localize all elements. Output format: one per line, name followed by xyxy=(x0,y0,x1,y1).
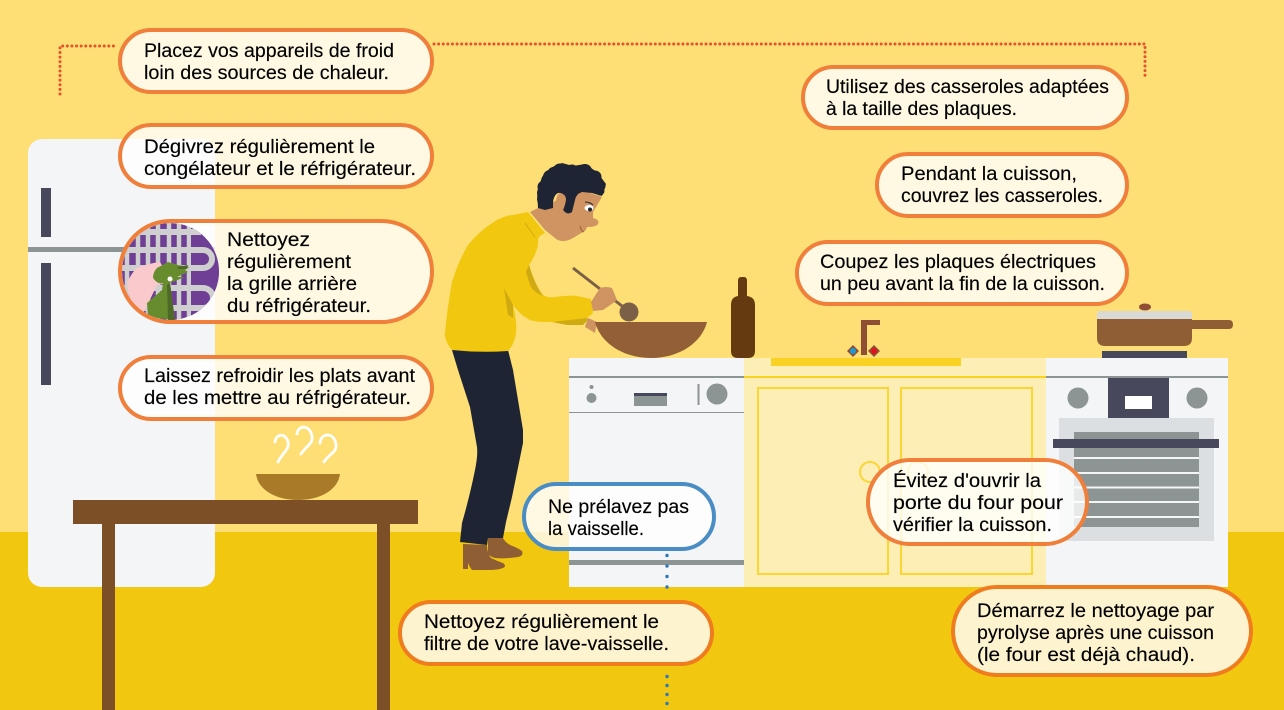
dotted line: blue xyxy=(665,554,669,705)
callout: refroidir les plats: de les mettre au réfrigérateur. xyxy=(144,388,411,409)
oven xyxy=(1046,358,1228,587)
callout: casseroles adaptées: Utilisez des casseroles adaptées xyxy=(826,77,1109,98)
callout: couper les plaques: un peu avant la fin de la cuisson. xyxy=(820,274,1105,295)
callout: porte du four xyxy=(868,460,1087,544)
callout: ne pas prélaver: la vaisselle. xyxy=(548,519,644,540)
callout: couvrir les casseroles: couvrez les casseroles. xyxy=(901,186,1103,207)
callout: filtre du lave-vaisselle: Nettoyez régulièrement le xyxy=(424,612,659,633)
boots xyxy=(463,538,522,570)
callout: dégivrer: congélateur et le réfrigérateur. xyxy=(144,159,416,180)
hand on bowl xyxy=(585,318,597,333)
ear xyxy=(556,193,566,210)
callout: ne pas prélaver xyxy=(524,484,714,549)
head and neck xyxy=(530,190,602,241)
floor xyxy=(0,532,1284,710)
callout: grille arrière: régulièrement xyxy=(227,252,352,273)
dishwasher xyxy=(569,358,745,587)
callout: filtre du lave-vaisselle xyxy=(400,602,712,664)
callout: pyrolyse: (le four est déjà chaud). xyxy=(977,645,1195,666)
eye xyxy=(584,202,594,212)
hair xyxy=(537,163,606,214)
callout: porte du four: porte du four pour xyxy=(893,493,1064,514)
callout: casseroles adaptées xyxy=(803,67,1127,128)
callout: appareils de froid: Placez vos appareils de froid xyxy=(144,41,394,62)
callout: pyrolyse: Démarrez le nettoyage par xyxy=(977,601,1215,622)
callout: porte du four: vérifier la cuisson. xyxy=(893,515,1052,536)
callout: filtre du lave-vaisselle: filtre de votre lave-vaisselle. xyxy=(424,634,669,655)
dotted line: red top route xyxy=(60,44,1145,94)
faucet xyxy=(847,320,880,357)
smile xyxy=(580,226,584,232)
sweater xyxy=(445,212,593,352)
callout: grille arrière: la grille arrière xyxy=(227,274,357,295)
callout: couvrir les casseroles xyxy=(877,154,1127,216)
callout: ne pas prélaver: Ne prélavez pas xyxy=(548,497,689,518)
callout: appareils de froid xyxy=(120,30,432,92)
callout: couper les plaques: Coupez les plaques électriques xyxy=(820,252,1096,273)
mixing bowl xyxy=(595,322,707,358)
cabinet and sink xyxy=(744,358,1047,587)
callout: refroidir les plats: Laissez refroidir les plats avant xyxy=(144,366,416,387)
callout: pyrolyse xyxy=(953,587,1251,675)
trousers xyxy=(452,350,523,545)
table with bowl and steam xyxy=(73,427,418,710)
callout: couper les plaques xyxy=(797,242,1127,304)
callout: grille arrière: du réfrigérateur. xyxy=(227,296,371,317)
callout: porte du four: Évitez d'ouvrir la xyxy=(893,471,1041,492)
callout: dégivrer: Dégivrez régulièrement le xyxy=(144,137,375,158)
callout: refroidir les plats xyxy=(120,357,432,419)
fridge xyxy=(28,139,215,587)
callout: pyrolyse: pyrolyse après une cuisson xyxy=(977,623,1214,644)
sweater shading xyxy=(504,223,588,325)
callout: casseroles adaptées: à la taille des plaques. xyxy=(826,99,1017,120)
callout: appareils de froid: loin des sources de chaleur. xyxy=(144,63,389,84)
hand holding spoon xyxy=(591,287,617,311)
callout: grille arrière: Nettoyez xyxy=(227,230,310,251)
pan on burner xyxy=(1097,304,1233,358)
wooden spoon xyxy=(573,268,638,322)
bottle xyxy=(731,277,755,358)
icon: hand cleaning condenser grille xyxy=(122,223,219,320)
callout: grille arrière xyxy=(120,220,432,324)
man cooking xyxy=(445,163,638,570)
callout: couvrir les casseroles: Pendant la cuisson, xyxy=(901,164,1077,185)
callout: dégivrer xyxy=(120,125,432,187)
